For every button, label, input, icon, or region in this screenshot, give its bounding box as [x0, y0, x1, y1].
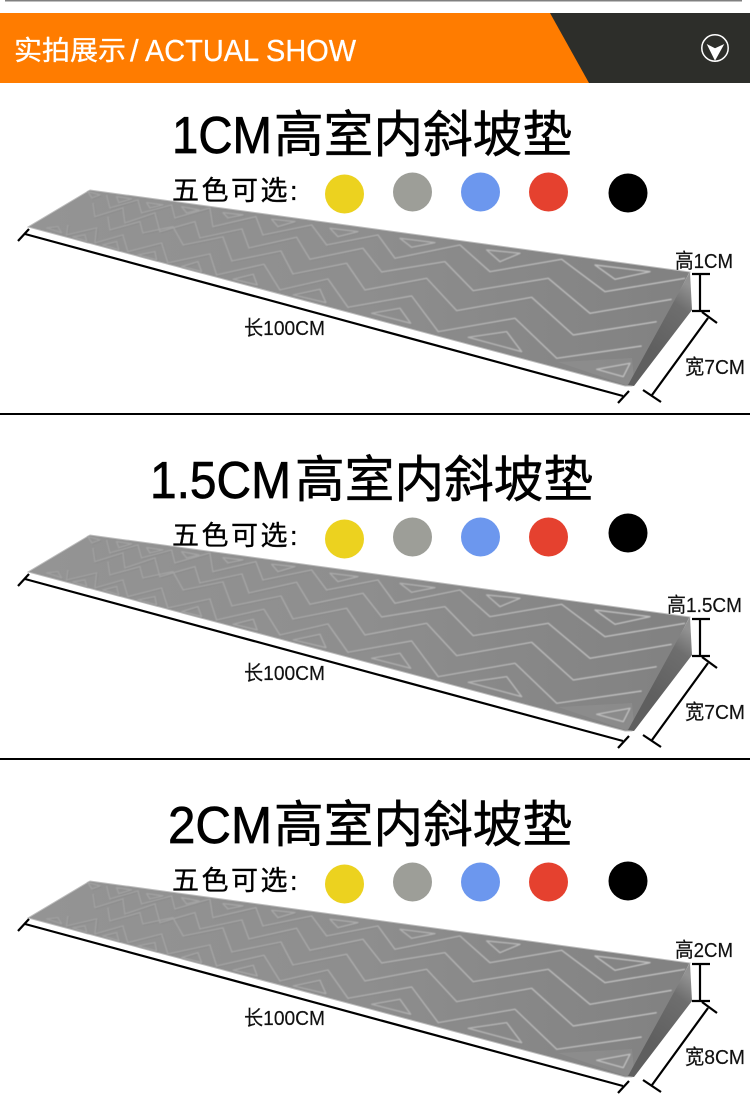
height label: 高2CM [675, 939, 733, 962]
panel: 1CM ramp [18, 107, 745, 403]
length label: 长100CM [244, 317, 325, 340]
heading: 1.5CM: 1.5CM [150, 452, 291, 510]
banner heading: / [130, 33, 139, 68]
banner orange panel [0, 13, 589, 83]
heading: 1.5CM: 高室内斜坡垫 [295, 452, 593, 508]
heading: 1.5CM [150, 452, 593, 510]
colour swatches [325, 862, 648, 904]
panel: 1.5CM ramp [18, 452, 745, 748]
top rule [5, 0, 742, 2]
colour options label: 五色可选: [172, 866, 300, 896]
width label: 宽7CM [685, 356, 745, 379]
ramp illustration [28, 881, 692, 1077]
colour swatches [325, 514, 648, 558]
panel: 2CM ramp [18, 797, 745, 1093]
height label: 高1CM [675, 250, 733, 273]
width label: 宽8CM [685, 1046, 745, 1069]
heading: 2CM: 2CM [168, 797, 272, 855]
ramp illustration [28, 190, 692, 386]
dimension lines [18, 574, 717, 748]
length label: 长100CM [244, 1007, 325, 1030]
heading: 1CM: 1CM [172, 107, 272, 165]
colour options label: 五色可选: [172, 521, 300, 551]
banner heading [14, 33, 357, 68]
dimension lines [18, 919, 717, 1093]
colour options label: 五色可选: [172, 176, 300, 206]
banner heading: ACTUAL SHOW [145, 33, 357, 68]
divider [0, 413, 750, 415]
heading: 1CM: 高室内斜坡垫 [274, 107, 572, 163]
icon: down arrow in circle [702, 35, 728, 61]
divider [0, 758, 750, 760]
banner heading: 实拍展示 [14, 36, 126, 66]
width label: 宽7CM [685, 701, 745, 724]
header banner [0, 13, 750, 83]
colour swatches [325, 172, 648, 214]
banner dark panel [540, 13, 750, 83]
heading: 2CM: 高室内斜坡垫 [274, 797, 572, 853]
ramp illustration [28, 535, 692, 731]
dimension lines [18, 229, 717, 403]
length label: 长100CM [244, 662, 325, 685]
height label: 高1.5CM [667, 594, 742, 617]
